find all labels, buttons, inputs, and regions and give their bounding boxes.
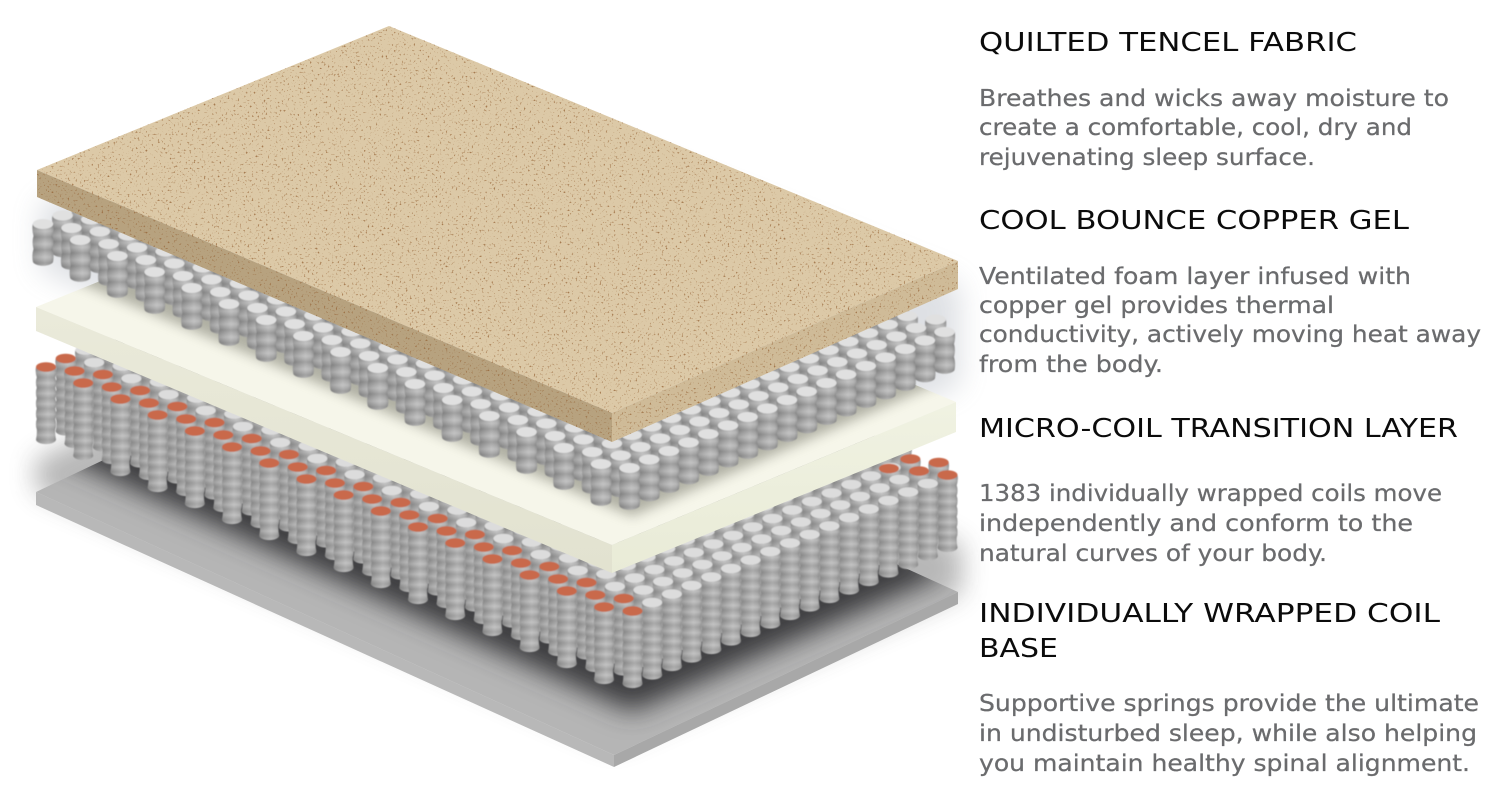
description — [979, 264, 1481, 378]
description: from the body. — [979, 352, 1163, 378]
description: Supportive springs provide the ultimate — [979, 691, 1479, 717]
layer: micro-coil transition foam — [36, 282, 956, 573]
description: create a comfortable, cool, dry and — [979, 115, 1412, 141]
section: quilted tencel fabric — [979, 28, 1449, 171]
layer: base slab — [36, 455, 958, 767]
section: individually wrapped coil base — [979, 599, 1479, 777]
heading: BASE — [979, 634, 1058, 664]
description — [979, 86, 1449, 171]
soft shadow behind lower layers — [35, 300, 962, 745]
description: you maintain healthy spinal alignment. — [979, 751, 1470, 777]
heading — [979, 599, 1441, 664]
mattress illustration — [30, 20, 965, 767]
description: Ventilated foam layer infused with — [979, 264, 1411, 290]
description: conductivity, actively moving heat away — [979, 322, 1481, 348]
heading: MICRO-COIL TRANSITION LAYER — [979, 414, 1458, 444]
soft shadow behind upper layers — [40, 60, 960, 520]
heading: COOL BOUNCE COPPER GEL — [979, 206, 1410, 236]
description: 1383 individually wrapped coils move — [979, 481, 1442, 507]
feature descriptions — [979, 28, 1481, 777]
description: Breathes and wicks away moisture to — [979, 86, 1449, 112]
description: copper gel provides thermal — [979, 293, 1334, 319]
section: micro-coil transition layer — [979, 414, 1458, 567]
description: natural curves of your body. — [979, 541, 1327, 567]
description: independently and conform to the — [979, 511, 1413, 537]
layer: quilted tencel top slab — [30, 20, 965, 450]
description — [979, 481, 1442, 567]
section: cool bounce copper gel — [979, 206, 1481, 378]
layer: individually wrapped coil base — [36, 218, 958, 688]
description — [979, 691, 1479, 777]
description: in undisturbed sleep, while also helping — [979, 721, 1477, 747]
heading: INDIVIDUALLY WRAPPED COIL — [979, 599, 1441, 629]
description: rejuvenating sleep surface. — [979, 145, 1315, 171]
layer: cool bounce copper gel micro coils — [32, 74, 955, 510]
heading: QUILTED TENCEL FABRIC — [979, 28, 1357, 58]
